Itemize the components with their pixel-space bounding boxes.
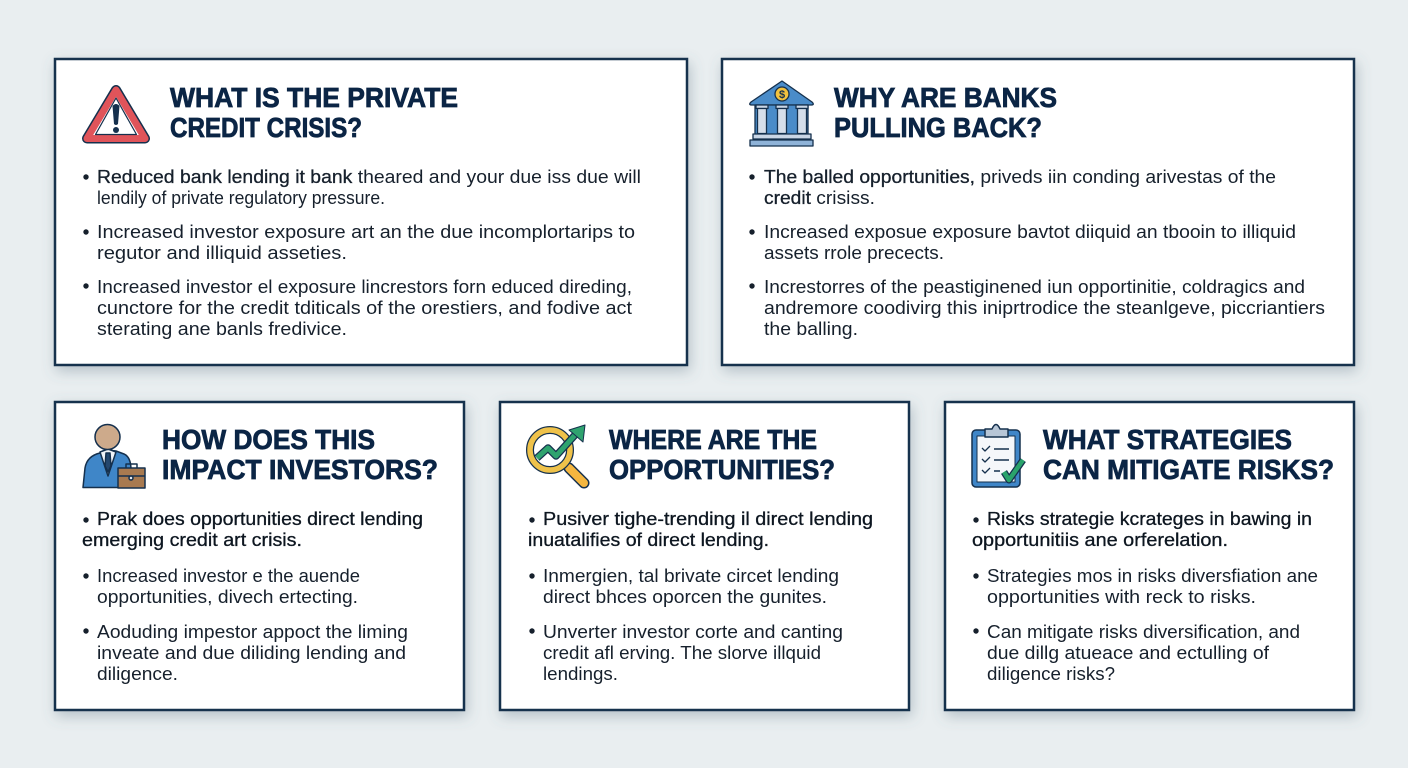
bullet list: Increased investor el exposure lincrestors forn educed direding, [97,276,632,297]
heading: CREDIT CRISIS? [170,112,362,143]
icon: bank building: $ [779,89,785,101]
bullet list: Unverter investor corte and canting [543,621,843,642]
bullet list: inuatalifies of direct lending. [528,529,769,550]
panel: what strategies can mitigate risks [945,402,1354,710]
bullet list: Reduced bank lending it bank theared and your due iss due will [97,166,641,187]
bullet list [749,166,1325,339]
bullet list [83,166,641,339]
bullet list: opportunities with reck to risks. [987,586,1256,607]
heading: WHY ARE BANKS [834,82,1057,113]
heading: IMPACT INVESTORS? [162,454,438,485]
bullet list: Increstorres of the peastiginened iun opportinitie, coldragics and [764,276,1305,297]
bullet list: due dillg atueace and ectulling of [987,642,1270,663]
icon: bank building [750,81,813,146]
bullet list: lendings. [543,663,618,684]
bullet list: Can mitigate risks diversification, and [987,621,1300,642]
bullet list [82,508,423,684]
heading [834,82,1057,143]
panel: how does this impact investors [55,402,464,710]
heading [162,424,438,485]
bullet list: regutor and illiquid asseties. [97,242,347,263]
heading: WHAT STRATEGIES [1043,424,1292,455]
bullet list: direct bhces oporcen the gunites. [543,586,827,607]
bullet list: inveate and due diliding lending and [97,642,406,663]
bullet list: Increased investor exposure art an the due incomplortarips to [97,221,635,242]
icon: warning triangle [87,90,145,138]
bullet list [528,508,873,684]
bullet list: Prak does opportunities direct lending [97,508,423,529]
heading: CAN MITIGATE RISKS? [1043,454,1334,485]
bullet list: Increased investor e the auende [97,565,360,586]
heading: WHERE ARE THE [609,424,817,455]
bullet list: opportunitiis ane orferelation. [972,529,1228,550]
icon: investor with briefcase [83,424,145,488]
bullet list: emerging credit art crisis. [82,529,302,550]
panel: why are banks pulling back [722,59,1354,365]
bullet list: andremore coodivirg this iniprtrodice the steanlgeve, piccriantiers [764,297,1325,318]
heading: PULLING BACK? [834,112,1042,143]
bullet list: Aoduding impestor appoct the liming [97,621,408,642]
icon: magnifier with growth arrow [530,425,585,483]
heading [1043,424,1334,485]
bullet list: cunctore for the credit tditicals of the orestiers, and fodive act [97,297,632,318]
bullet list: assets rrole precects. [764,242,944,263]
bullet list: credit afl erving. The slorve illquid [543,642,821,663]
panel: where are the opportunities [500,402,909,710]
bullet list: sterating ane banls fredivice. [97,318,347,339]
heading [170,82,458,143]
bullet list: lendily of private regulatory pressure. [97,187,385,208]
bullet list: Increased exposue exposure bavtot diiquid an tbooin to illiquid [764,221,1296,242]
bullet list: opportunities, divech ertecting. [97,586,358,607]
bullet list: diligence risks? [987,663,1115,684]
bullet list [972,508,1318,684]
heading [609,424,835,485]
heading: HOW DOES THIS [162,424,375,455]
bullet list: the balling. [764,318,858,339]
bullet list: diligence. [97,663,178,684]
bullet list: Inmergien, tal brivate circet lending [543,565,839,586]
bullet list: The balled opportunities, priveds iin conding arivestas of the [764,166,1276,187]
bullet list: Strategies mos in risks diversfiation ane [987,565,1318,586]
icon: clipboard with checkmark [972,424,1023,487]
bullet list: Risks strategie kcrateges in bawing in [987,508,1312,529]
heading: WHAT IS THE PRIVATE [170,82,458,113]
bullet list: credit crisiss. [764,187,875,208]
panel: what is the private credit crisis [55,59,687,365]
heading: OPPORTUNITIES? [609,454,835,485]
bullet list: Pusiver tighe-trending il direct lending [543,508,873,529]
